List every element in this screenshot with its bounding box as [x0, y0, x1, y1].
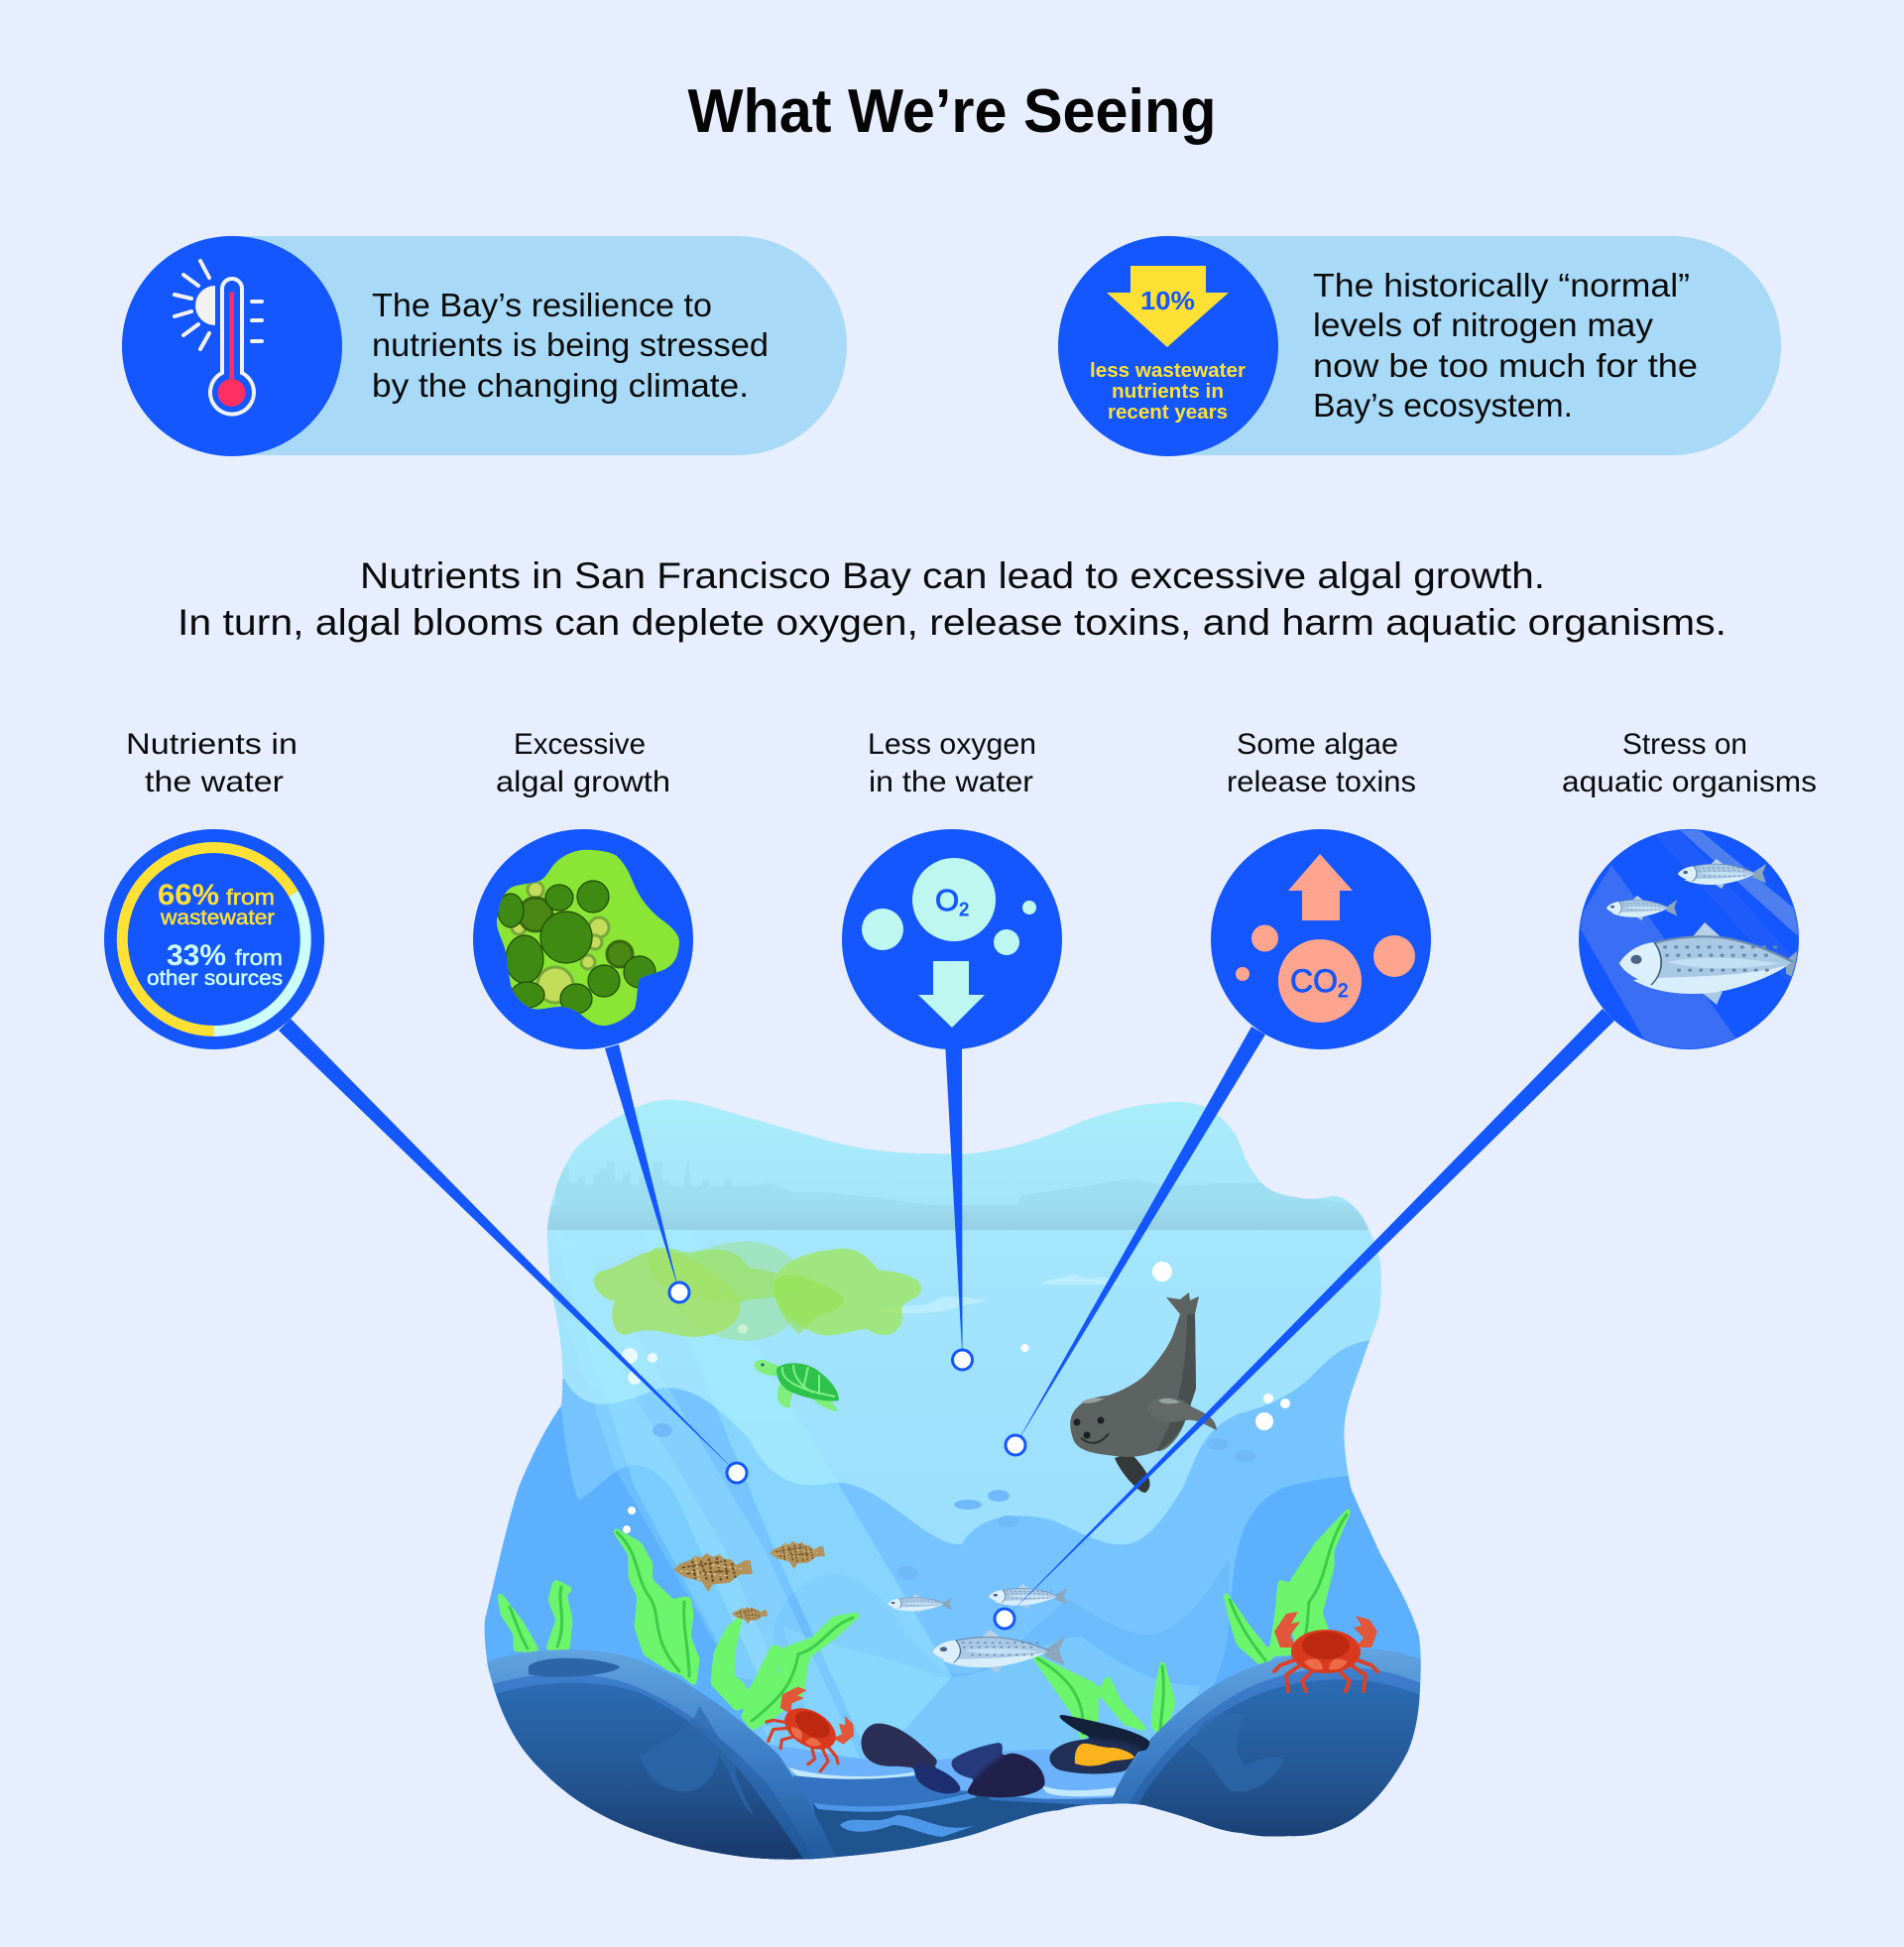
rock: left: [487, 1649, 837, 1860]
text: nitrogen statement: [1313, 267, 1698, 424]
column labels: Less oxygen: [868, 728, 1036, 761]
text: climate statement: [372, 287, 769, 404]
callout line: toxins: [1015, 1027, 1265, 1445]
seal: [1070, 1292, 1217, 1493]
callout pins: [669, 1282, 1025, 1629]
column labels: Nutrients in: [126, 728, 298, 761]
light lower centre: [783, 1627, 1200, 1760]
icon: thermometer and sun: [122, 236, 342, 456]
column labels: Excessive: [514, 728, 646, 761]
circle: nutrients breakdown: 33%: [167, 939, 226, 972]
panel: climate pill: [122, 236, 847, 456]
left dark wave: [484, 1408, 774, 1726]
algae cells: [498, 881, 655, 1014]
icon: 10 percent down arrow: nutrients in: [1112, 380, 1224, 403]
column labels: release toxins: [1227, 766, 1416, 798]
circle: nutrients breakdown: from: [235, 945, 283, 970]
small water flecks: [653, 1423, 1255, 1580]
callout line: algal growth: [605, 1044, 679, 1292]
circle: toxins: [1211, 829, 1431, 1049]
circle: less oxygen: O: [935, 883, 959, 917]
circle: stress on aquatic organisms: [1577, 829, 1816, 1051]
mussel meat: [1075, 1744, 1134, 1765]
callout line: nutrients: [279, 1019, 737, 1473]
seaweed: left veins: [510, 1532, 853, 1721]
callout line: oxygen: [945, 1041, 962, 1360]
mussel shells: [862, 1714, 1150, 1797]
circle: nutrients breakdown: other sources: [147, 967, 283, 990]
circle: algal growth: [473, 829, 693, 1049]
callout line: stress: [1005, 1009, 1614, 1619]
seaweed: right veins: [1037, 1515, 1347, 1734]
right dark wave: [1214, 1476, 1421, 1714]
column labels: in the water: [869, 766, 1033, 798]
surface glints: [877, 1274, 1123, 1313]
light rays: [593, 1389, 952, 1758]
circle: less oxygen: [842, 829, 1062, 1049]
salmon in water: [888, 1584, 1067, 1673]
circle: nutrients breakdown: from: [226, 885, 275, 910]
turtle: [755, 1360, 839, 1411]
bubbles: [622, 1262, 1290, 1533]
skyline and hills: [555, 1161, 1353, 1205]
circle: less oxygen: 2: [959, 900, 969, 919]
icon: 10 percent down arrow: [1058, 236, 1278, 456]
text: nitrogen statement: levels of nitrogen may: [1313, 306, 1654, 343]
algal blooms on surface: [594, 1242, 921, 1341]
mid water lift: [774, 1557, 1230, 1726]
seaweed: left group: [500, 1530, 858, 1728]
panel: nitrogen pill: [1058, 236, 1781, 456]
column labels: Stress on: [1622, 728, 1747, 761]
column labels: aquatic organisms: [1562, 766, 1817, 798]
circle: nutrients breakdown: wastewater: [160, 907, 275, 929]
text: nitrogen statement: Bay’s ecosystem.: [1313, 387, 1573, 424]
column labels: algal growth: [496, 766, 670, 798]
rock: right: [1111, 1648, 1421, 1837]
circle: nutrients breakdown: 66%: [158, 879, 219, 912]
mussels: [862, 1714, 1150, 1797]
rockfish: [673, 1541, 825, 1625]
intro text: Nutrients in San Francisco Bay can lead to excessive algal growth.: [360, 555, 1545, 596]
icon: 10 percent down arrow: recent years: [1108, 401, 1228, 424]
icon: 10 percent down arrow: 10%: [1140, 286, 1195, 315]
column labels: Some algae: [1237, 728, 1398, 761]
horizon band: [547, 1205, 1368, 1230]
seaweed: centre and right groups: [1034, 1511, 1349, 1738]
water body: [484, 1230, 1421, 1805]
light wave: [476, 1339, 1428, 1885]
crab: left: [759, 1680, 862, 1777]
title: What We’re Seeing: [688, 77, 1216, 146]
circle: nutrients breakdown: [104, 829, 324, 1049]
column labels: [126, 728, 1817, 798]
basin floor: [760, 1746, 1158, 1860]
intro text: In turn, algal blooms can deplete oxygen, release toxins, and harm aquatic organisms.: [178, 602, 1726, 643]
sky: [547, 1099, 1368, 1230]
crab: right: [1274, 1612, 1377, 1691]
scene: bay cross-section: [466, 1091, 1438, 1885]
column labels: the water: [145, 766, 284, 798]
text: climate statement: nutrients is being stressed: [372, 326, 769, 363]
text: climate statement: The Bay’s resilience to: [372, 287, 712, 323]
text: climate statement: by the changing climate.: [372, 367, 749, 404]
text: nitrogen statement: now be too much for the: [1313, 347, 1698, 384]
intro text: [178, 555, 1726, 643]
icon: 10 percent down arrow: less wastewater: [1090, 359, 1246, 382]
circle: toxins: 2: [1338, 981, 1349, 1002]
circle: toxins: CO: [1290, 963, 1338, 999]
text: nitrogen statement: The historically “normal”: [1313, 267, 1690, 304]
